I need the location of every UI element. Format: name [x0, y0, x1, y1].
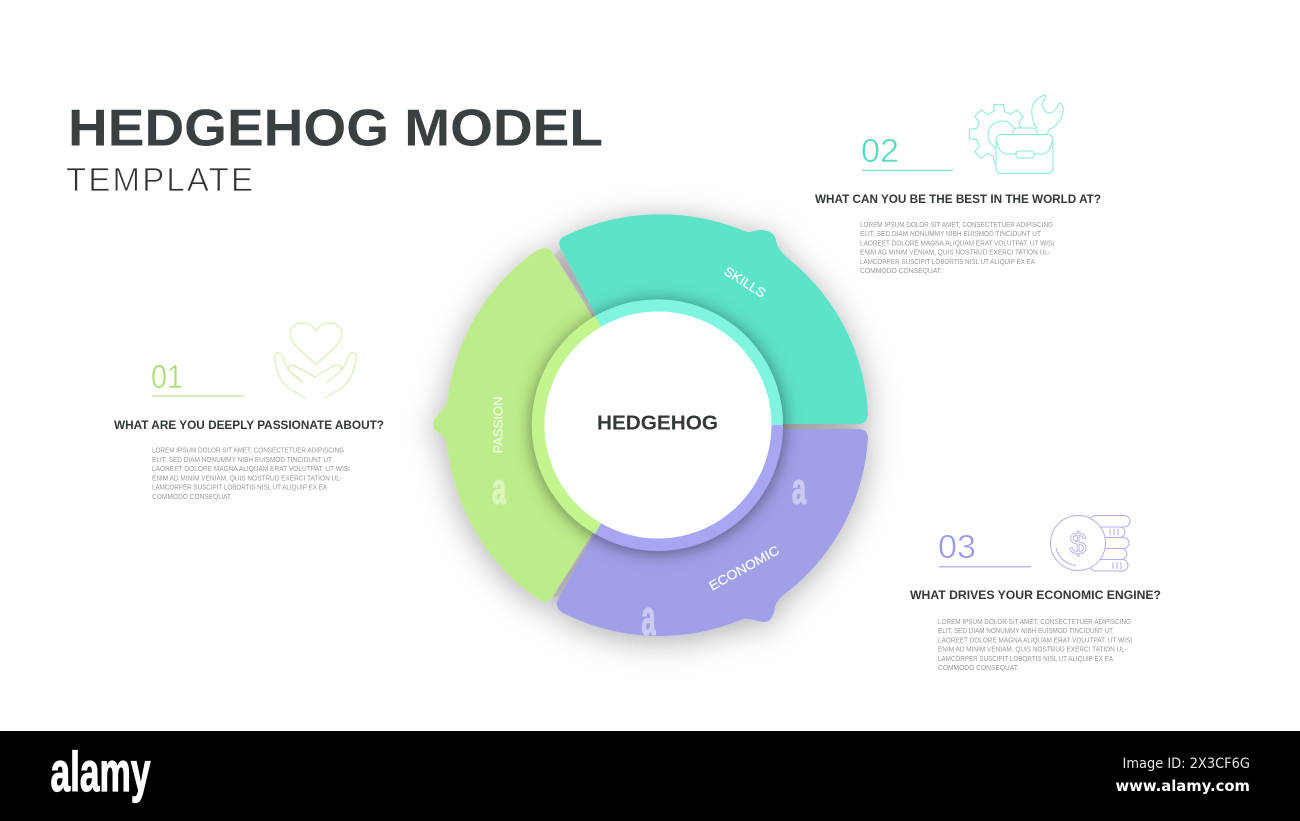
- ring arc: economic: [595, 425, 783, 551]
- number 02: 02: [861, 132, 899, 169]
- icon: heart in hands: [275, 323, 356, 398]
- body text: LAMCORPER SUSCIPIT LOBORTIS NISL UT ALIQUIP EX EA: [938, 656, 1113, 663]
- footer band: [0, 731, 1300, 821]
- watermark letter: economic bottom: a: [642, 592, 656, 646]
- image id: Image ID: 2X3CF6G: [1122, 756, 1250, 772]
- body text: ELIT, SED DIAM NONUMMY NIBH EUISMOD TINCIDUNT UT: [860, 231, 1042, 238]
- gap shading between segments: [553, 248, 860, 598]
- body text: ENIM AD MINIM VENIAM, QUIS NOSTRUD EXERCI TATION UL-: [860, 250, 1051, 257]
- segment: skills: [559, 214, 868, 424]
- body text: ELIT, SED DIAM NONUMMY NIBH EUISMOD TINCIDUNT UT: [152, 457, 333, 464]
- body text: ENIM AD MINIM VENIAM, QUIS NOSTRUD EXERCI TATION UL-: [938, 647, 1128, 654]
- body text: ENIM AD MINIM VENIAM, QUIS NOSTRUD EXERCI TATION UL-: [152, 475, 343, 482]
- footer logo: alamy: [50, 740, 150, 803]
- body text: ELIT, SED DIAM NONUMMY NIBH EUISMOD TINCIDUNT UT: [938, 628, 1114, 635]
- body text: LAOREET DOLORE MAGNA ALIQUAM ERAT VOLUTPAT. UT WISI: [860, 240, 1054, 247]
- segments: [433, 214, 868, 636]
- number rule: [939, 566, 1031, 567]
- body text: LAOREET DOLORE MAGNA ALIQUAM ERAT VOLUTPAT. UT WISI: [152, 466, 350, 473]
- body text: COMMODO CONSEQUAT.: [152, 494, 232, 501]
- ring arc: skills: [595, 299, 783, 425]
- number 01: 01: [151, 358, 183, 395]
- body text: COMMODO CONSEQUAT.: [938, 665, 1019, 672]
- body text: LOREM IPSUM DOLOR SIT AMET, CONSECTETUER ADIPISCING: [938, 619, 1131, 626]
- body text: LOREM IPSUM DOLOR SIT AMET, CONSECTETUER ADIPISCING: [860, 222, 1053, 229]
- panel: 03 economic: [910, 516, 1161, 672]
- site url: www.alamy.com: [1116, 777, 1250, 795]
- icon: gear, wrench and briefcase: [969, 95, 1063, 174]
- body text: [938, 619, 1132, 672]
- segment: passion: [433, 248, 658, 602]
- question: WHAT DRIVES YOUR ECONOMIC ENGINE?: [910, 588, 1161, 602]
- inner ring: [532, 299, 783, 551]
- question: WHAT ARE YOU DEEPLY PASSIONATE ABOUT?: [114, 418, 384, 432]
- watermark letter: economic right: a: [792, 464, 806, 514]
- watermark letter: passion: a: [492, 464, 506, 514]
- segment: economic: [557, 429, 868, 636]
- body text: COMMODO CONSEQUAT.: [860, 268, 942, 275]
- label: skills: SKILLS: [722, 263, 769, 301]
- number rule: [152, 396, 244, 397]
- center label: HEDGEHOG: [597, 412, 718, 434]
- label: passion: PASSION: [490, 397, 506, 453]
- body text: [152, 448, 350, 501]
- panel: 02 skills: [815, 95, 1101, 275]
- center circle: [544, 312, 772, 538]
- body text: LAOREET DOLORE MAGNA ALIQUAM ERAT VOLUTPAT. UT WISI: [938, 637, 1132, 644]
- body text: LAMCORPER SUSCIPIT LOBORTIS NISL UT ALIQUIP EX EA: [152, 485, 327, 492]
- hedgehog circular diagram: [433, 214, 868, 646]
- panel: 01 passion: [114, 323, 384, 501]
- body text: [860, 222, 1054, 275]
- label: economic: ECONOMIC: [706, 543, 782, 593]
- icon: dollar coins: [1050, 516, 1130, 571]
- ring arc: passion: [532, 316, 658, 534]
- number 03: 03: [938, 528, 976, 565]
- question: WHAT CAN YOU BE THE BEST IN THE WORLD AT?: [815, 192, 1101, 206]
- body text: LAMCORPER SUSCIPIT LOBORTIS NISL UT ALIQUIP EX EA: [860, 259, 1035, 266]
- subtitle: TEMPLATE: [66, 161, 253, 198]
- body text: LOREM IPSUM DOLOR SIT AMET, CONSECTETUER ADIPISCING: [152, 448, 344, 455]
- number rule: [862, 170, 953, 171]
- title: HEDGEHOG MODEL: [68, 100, 603, 158]
- dollar glyph: $: [1069, 526, 1087, 561]
